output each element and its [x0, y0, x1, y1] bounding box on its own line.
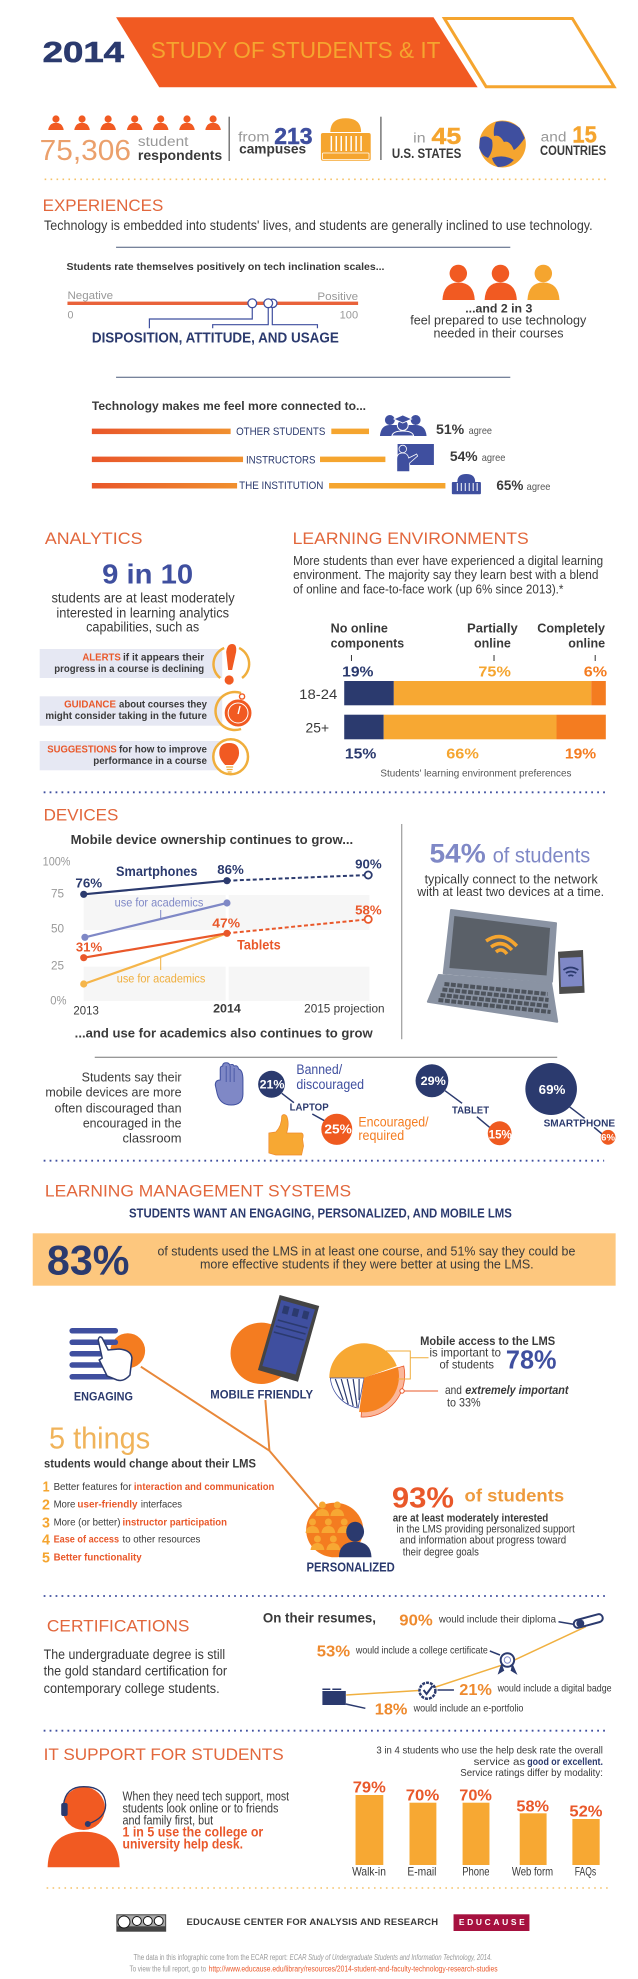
help desk text: service as: [474, 1757, 525, 1768]
stacked bar chart: 19%: [565, 746, 596, 763]
stacked bar chart: components: [331, 636, 404, 651]
list: five things: Ease of access: [54, 1535, 119, 1546]
stat: campuses: [238, 118, 371, 161]
stat: campuses: campuses: [239, 140, 306, 156]
stat: countries: and: [541, 129, 566, 145]
inclination scale: 0: [67, 309, 73, 321]
footer sources: http://www.educause.edu/library/resources/2014-student-and-faculty-technology-research-studies: [209, 1965, 498, 1974]
bubbles: tablet: 15%: [489, 1127, 512, 1141]
stacked bar chart: Students' learning environment preferences: [380, 769, 571, 780]
chart: resume items: would include a college certificate: [355, 1645, 488, 1656]
bar chart: service ratings: Phone: [462, 1866, 489, 1878]
icon: digital badge: [420, 1683, 435, 1699]
bar chart: service ratings: 52%: [569, 1804, 603, 1821]
support text: students look online or to friends: [123, 1801, 278, 1816]
stat: U.S. states: in: [413, 129, 426, 145]
bar chart: service ratings: [352, 1780, 603, 1878]
stat: 93% of students: in the LMS providing personalized support: [396, 1524, 575, 1536]
bar chart: service ratings: Web form: [512, 1866, 553, 1878]
stat: student respondents: respondents: [138, 147, 222, 163]
list: five things: 4: [42, 1531, 51, 1548]
text block: the gold standard certification for: [44, 1663, 227, 1679]
stat: 54% of students: [416, 838, 604, 899]
support text: [123, 1789, 289, 1852]
stat: 93% of students: of students: [465, 1486, 564, 1506]
intro text: [293, 553, 603, 597]
text: mobile access: extremely important: [465, 1385, 570, 1397]
icon: ribbon: [499, 1653, 516, 1673]
stat: 54% of students: 54%: [430, 838, 486, 868]
bar chart: service ratings: 58%: [516, 1799, 549, 1816]
icon: mobile friendly: [210, 1295, 319, 1402]
text: discouraged vs encouraged: encouraged in the: [83, 1116, 182, 1131]
stat: campuses: 213: [274, 123, 312, 149]
list: five things: instructor participation: [123, 1518, 227, 1529]
list: five things: More (or better): [54, 1518, 120, 1529]
footer logos: [116, 1914, 529, 1932]
scale heading: Students rate themselves positively on tech inclination scales...: [66, 262, 385, 273]
line chart: 100%: [43, 855, 71, 869]
chart: resume items: 18%: [375, 1701, 407, 1718]
stat: 93% of students: their degree goals: [403, 1546, 479, 1558]
stat: student respondents: [40, 115, 222, 167]
bar chart: service ratings: 70%: [459, 1788, 492, 1805]
bubbles: laptop: LAPTOP: [290, 1103, 329, 1114]
help desk text: good or excellent.: [527, 1757, 603, 1768]
icon: personalized: PERSONALIZED: [307, 1560, 395, 1575]
inclination scale: Negative: [67, 290, 113, 302]
panel: learning environments: [293, 529, 607, 780]
text block: contemporary college students.: [44, 1680, 220, 1696]
icon: diploma: [573, 1613, 604, 1629]
line chart: 75: [51, 887, 64, 901]
stacked bar chart: 18-24: [299, 686, 338, 702]
bar chart: service ratings: E-mail: [407, 1866, 436, 1878]
stat: countries: COUNTRIES: [540, 142, 606, 158]
line chart: use for academics: [117, 972, 205, 986]
stacked bar chart: 6%: [584, 664, 607, 681]
help desk text: [376, 1746, 603, 1779]
callout: suggestions: for how to improve: [119, 745, 207, 756]
chart: resume items: 53%: [317, 1644, 350, 1661]
list: five things: [42, 1479, 274, 1567]
text: mobile access: of students: [439, 1360, 494, 1372]
line chart: Smartphones: [116, 863, 198, 879]
stat: 93% of students: are at least moderately interested: [393, 1513, 548, 1525]
panel: analytics: [40, 529, 251, 774]
callout band: 83%: 83%: [47, 1236, 129, 1283]
heading: 5 things: [44, 1420, 256, 1471]
line chart: 2014: [213, 1004, 242, 1016]
description: capabilities, such as: [86, 619, 199, 635]
bubbles: laptop: 25%: [324, 1121, 352, 1136]
support text: 1 in 5 use the college or: [123, 1824, 264, 1840]
stat: 93% of students: 93%: [392, 1482, 454, 1514]
icon: personalized: [306, 1502, 395, 1575]
icon: support agent: [48, 1787, 120, 1867]
stat: 93% of students: [392, 1482, 575, 1558]
icon: campus building: [321, 118, 371, 161]
bubbles: smartphone: 6%: [601, 1133, 615, 1143]
row: the institution: agree: [527, 482, 551, 493]
row: instructors: 54%: [450, 448, 478, 464]
callout: suggestions: performance in a course: [93, 756, 207, 767]
panel: devices: [43, 806, 615, 1155]
bubbles: smartphone: [525, 1063, 615, 1145]
panel: learning management systems: [33, 1182, 616, 1575]
bubbles: smartphone: SMARTPHONE: [544, 1119, 615, 1130]
text: discouraged vs encouraged: often discouraged than: [55, 1100, 182, 1115]
bar chart: service ratings: 79%: [353, 1780, 386, 1797]
list: five things: user-friendly: [77, 1500, 138, 1511]
connector lines: [141, 1367, 318, 1508]
text: mobile access: and: [445, 1385, 462, 1397]
stacked bar chart: 15%: [345, 746, 376, 763]
line chart: 31%: [76, 940, 103, 955]
stacked bar chart: 25+: [306, 719, 329, 735]
header banner: [43, 17, 614, 87]
chart: resume items: On their resumes,: [263, 1609, 376, 1625]
panel: certifications: [44, 1609, 612, 1718]
bar chart: service ratings: FAQs: [575, 1866, 596, 1878]
row: the institution: [92, 474, 551, 494]
chart: resume items: would include a digital badge: [497, 1684, 612, 1695]
stat: 54% of students: typically connect to the network: [425, 871, 598, 886]
text block: [44, 1646, 227, 1696]
text block: The undergraduate degree is still: [44, 1646, 225, 1662]
EDUCAUSE logo: [454, 1914, 529, 1931]
text: mobile access: [420, 1336, 570, 1410]
text: discouraged vs encouraged: Students say their: [82, 1070, 182, 1085]
callout: 2 in 3: [410, 302, 587, 340]
chart: resume items: 90%: [399, 1613, 433, 1630]
stat: 93% of students: and information about progress toward: [400, 1535, 566, 1547]
row: instructors: [92, 444, 506, 472]
panel: IT support for students: [44, 1745, 603, 1878]
heading: LEARNING ENVIRONMENTS: [293, 529, 529, 548]
line chart: 47%: [212, 916, 241, 931]
callout: alerts: ALERTS: [82, 653, 121, 664]
chart: resume items: 21%: [459, 1682, 492, 1699]
stacked bar chart: [299, 620, 607, 780]
stacked bar chart: Partially: [467, 620, 519, 635]
stacked bar chart: 19%: [342, 664, 373, 681]
bubbles: tablet: 29%: [421, 1074, 446, 1088]
list: five things: Better features for: [54, 1482, 132, 1493]
callout: suggestions: [40, 739, 248, 774]
callout band: 83%: more effective students if they were better at using the LMS.: [200, 1257, 534, 1272]
text: discouraged vs encouraged: [45, 1070, 182, 1145]
description: interested in learning analytics: [56, 605, 229, 621]
bubbles: laptop: required: [358, 1127, 404, 1143]
text: mobile access: 78%: [506, 1347, 557, 1375]
chart: resume items: would include their diploma: [438, 1615, 556, 1626]
heading: CERTIFICATIONS: [47, 1617, 189, 1636]
line chart: 50: [51, 922, 64, 936]
EDUCAUSE logo: EDUCAUSE: [459, 1917, 525, 1927]
bar chart: service ratings: 70%: [406, 1788, 439, 1805]
callout band: 83%: [33, 1233, 616, 1286]
line chart: 86%: [217, 862, 244, 877]
stacked bar chart: Completely: [537, 620, 606, 635]
row: the institution: THE INSTITUTION: [239, 480, 323, 492]
stat: U.S. states: [392, 123, 462, 161]
callout: guidance: might consider taking in the future: [45, 711, 207, 722]
callout band: 83%: of students used the LMS in at least one course, and 51% say they could be: [158, 1244, 575, 1259]
icon: engaging: ENGAGING: [74, 1390, 133, 1404]
text: mobile access: Mobile access to the LMS: [420, 1336, 556, 1348]
intro text: Technology is embedded into students' lives, and students are generally inclined to use technology.: [44, 218, 593, 233]
heading: EXPERIENCES: [43, 196, 163, 215]
list: five things: More: [54, 1500, 76, 1511]
bubbles: tablet: TABLET: [452, 1105, 490, 1116]
help desk text: 3 in 4 students who use the help desk rate the overall: [376, 1746, 603, 1757]
line chart: Tablets: [237, 937, 281, 953]
row: instructors: INSTRUCTORS: [246, 455, 315, 467]
callout: 2 in 3: ...and 2 in 3: [465, 302, 533, 316]
title: STUDY OF STUDENTS & IT: [151, 37, 440, 63]
callout: alerts: [40, 644, 249, 685]
bubbles: laptop: 21%: [260, 1077, 285, 1091]
callout: suggestions: SUGGESTIONS: [47, 745, 117, 756]
list: five things: 2: [42, 1496, 50, 1513]
line chart: 76%: [75, 875, 103, 890]
connected heading: Technology makes me feel more connected to...: [92, 399, 366, 413]
callout: 2 in 3: needed in their courses: [434, 325, 563, 340]
bubbles: laptop: Banned/: [296, 1061, 342, 1077]
line chart: 58%: [355, 902, 382, 917]
list: five things: 3: [42, 1514, 50, 1531]
row: other students: agree: [469, 426, 492, 437]
line chart: 25: [51, 958, 64, 972]
description: students are at least moderately: [51, 590, 235, 606]
row: the institution: 65%: [496, 477, 524, 493]
stat: countries: [540, 121, 606, 158]
row: other students: 51%: [436, 421, 465, 437]
stat: 9 in 10: 9 in 10: [102, 558, 193, 589]
callout: alerts: progress in a course is declining: [54, 664, 204, 675]
footer sources: ECAR Study of Undergraduate Students and Information Technology, 2014.: [290, 1953, 492, 1962]
intro text: More students than ever have experienced a digital learning: [293, 553, 603, 568]
row: instructors: agree: [482, 453, 506, 464]
icon: laptop and phone: [428, 910, 585, 1022]
chart: resume items: [263, 1609, 612, 1718]
text: discouraged vs encouraged: mobile devices are more: [45, 1085, 182, 1100]
callout: guidance: GUIDANCE: [64, 700, 116, 711]
chart title: Mobile device ownership continues to grow...: [71, 833, 353, 847]
bar chart: service ratings: Walk-in: [352, 1866, 386, 1878]
heading: ANALYTICS: [45, 529, 142, 548]
line chart: 90%: [355, 856, 382, 871]
chart footnote: ...and use for academics also continues to grow: [75, 1026, 374, 1041]
line chart: 2015 projection: [304, 1004, 385, 1016]
chart: resume items: would include an e-portfolio: [413, 1704, 524, 1715]
year: 2014: [43, 37, 124, 69]
list: five things: interaction and communication: [134, 1482, 274, 1493]
callout: alerts: if it appears their: [123, 653, 204, 664]
stacked bar chart: online: [568, 636, 605, 651]
subheading: STUDENTS WANT AN ENGAGING, PERSONALIZED, AND MOBILE LMS: [129, 1207, 512, 1221]
icon: three people: [442, 265, 559, 300]
intro text: environment. The majority say they learn best with a blend: [293, 567, 598, 582]
callout: 2 in 3: feel prepared to use technology: [410, 312, 587, 327]
bubbles: smartphone: 69%: [539, 1082, 566, 1097]
icon: creative commons badge: [116, 1914, 166, 1932]
icon: folder: [322, 1688, 346, 1705]
icon: thumbs up: [269, 1114, 304, 1155]
description: [51, 590, 235, 635]
list: five things: 5: [42, 1550, 50, 1567]
stat: countries: 15: [572, 121, 597, 147]
bubbles: laptop: [258, 1061, 429, 1145]
stacked bar chart: 66%: [446, 746, 479, 763]
line chart: use for academics: [115, 896, 203, 910]
footer sources: [129, 1953, 498, 1974]
stat: 54% of students: of students: [493, 844, 590, 867]
stacked bar chart: 75%: [478, 664, 511, 681]
bubbles: laptop: discouraged: [296, 1076, 364, 1092]
chart: mobile access pie: [329, 1343, 438, 1417]
heading: DEVICES: [44, 806, 118, 825]
inclination scale: [67, 290, 358, 346]
row: other students: OTHER STUDENTS: [236, 426, 325, 438]
bubbles: tablet: [416, 1064, 512, 1145]
stat: U.S. states: 45: [432, 123, 462, 149]
panel: experiences: [43, 196, 593, 494]
heading: LEARNING MANAGEMENT SYSTEMS: [45, 1182, 351, 1201]
text: mobile access: is important to: [430, 1348, 501, 1360]
icon: light bulb: [213, 739, 248, 774]
list: five things: 1: [43, 1479, 50, 1496]
inclination scale: DISPOSITION, ATTITUDE, AND USAGE: [92, 329, 339, 346]
row: other students: [92, 415, 492, 438]
organisation name: EDUCAUSE CENTER FOR ANALYSIS AND RESEARCH: [186, 1917, 438, 1928]
text: discouraged vs encouraged: classroom: [123, 1130, 182, 1145]
support text: university help desk.: [123, 1836, 243, 1852]
icon: stopwatch: [216, 692, 251, 730]
stat: campuses: from: [238, 129, 269, 145]
stat: student respondents: student: [138, 133, 189, 149]
stat: 54% of students: with at least two devices at a time.: [416, 884, 604, 899]
text: mobile access: to 33%: [447, 1398, 481, 1410]
stat: U.S. states: U.S. STATES: [392, 145, 461, 161]
intro text: of online and face-to-face work (up 6% since 2013).*: [293, 582, 563, 597]
line chart: 0%: [50, 994, 67, 1008]
callout: guidance: [40, 692, 251, 730]
icon: globe: [479, 120, 526, 168]
stacked bar chart: No online: [331, 620, 388, 635]
inclination scale: Positive: [317, 291, 358, 303]
support text: and family first, but: [123, 1813, 213, 1828]
callout: guidance: about courses they: [119, 700, 207, 711]
list: five things: to other resources: [123, 1535, 200, 1546]
support text: When they need tech support, most: [123, 1789, 289, 1804]
icon: mobile friendly: MOBILE FRIENDLY: [210, 1388, 313, 1402]
help desk text: Service ratings differ by modality:: [460, 1768, 603, 1779]
heading: IT SUPPORT FOR STUDENTS: [44, 1745, 284, 1764]
heading: 5 things: 5 things: [49, 1420, 150, 1455]
footer sources: The data in this infographic come from the ECAR report:: [134, 1953, 288, 1962]
icon: exclamation: [213, 644, 249, 685]
heading: 5 things: students would change about their LMS: [44, 1457, 256, 1471]
footer sources: To view the full report, go to: [129, 1965, 207, 1974]
list: five things: Better functionality: [54, 1553, 142, 1564]
line chart: [43, 855, 385, 1017]
icon: stop hand: [215, 1063, 243, 1105]
stacked bar chart: online: [474, 636, 511, 651]
icon: engaging: [69, 1328, 145, 1404]
bubbles: laptop: Encouraged/: [358, 1114, 429, 1130]
line chart: 2013: [73, 1005, 99, 1017]
inclination scale: 100: [340, 309, 358, 321]
list: five things: interfaces: [141, 1500, 182, 1511]
stat: student respondents: 75,306: [40, 135, 131, 167]
